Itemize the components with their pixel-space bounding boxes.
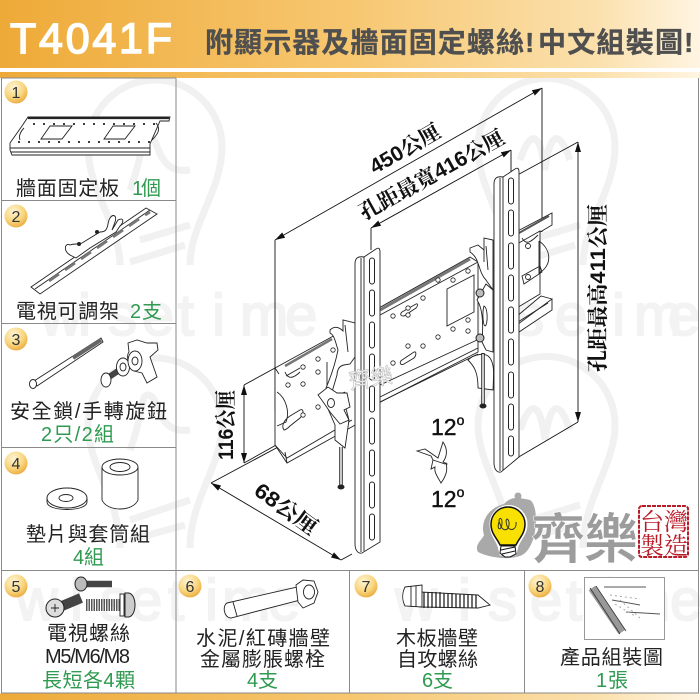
plate right extension — [510, 213, 552, 338]
watermark: brand text — [15, 283, 700, 633]
icon: washer — [116, 358, 130, 376]
bottom strip — [0, 694, 700, 700]
header slogan: 中文組裝圖 — [538, 27, 683, 58]
badge 1 — [4, 80, 28, 104]
label: 產品組裝圖 — [560, 646, 663, 669]
icon: expansion bolt — [224, 580, 318, 618]
badge 6: 6 — [186, 579, 195, 596]
right vertical rail — [494, 168, 519, 472]
red seal: 製 — [640, 533, 664, 560]
quantity: 1張 — [596, 670, 628, 692]
watermark: brand text: wisetime — [394, 283, 700, 348]
panel 5: TV screws — [4, 574, 135, 692]
tilt angle lower: 12 — [431, 486, 457, 512]
badge 2: 2 — [12, 209, 21, 226]
icon: wall plate — [10, 117, 170, 155]
panel 8: assembly diagram sheet — [528, 574, 664, 692]
red seal — [639, 506, 688, 560]
label: 牆面固定板 — [16, 177, 119, 200]
tilt angle upper: 12 — [431, 414, 457, 440]
badge 8: 8 — [536, 579, 545, 596]
icon: washer — [47, 488, 87, 510]
quantity: 長短各4顆 — [42, 669, 135, 692]
header underline strip — [0, 72, 700, 78]
watermark: brand text: wisetime — [39, 283, 317, 348]
label: 電視螺絲 — [47, 622, 130, 645]
badge 7: 7 — [362, 579, 371, 596]
header slogan: ! — [525, 27, 534, 58]
label: 墊片與套筒組 — [26, 523, 150, 546]
panel 4: washer and sleeve — [4, 452, 150, 569]
tilt angle lower: o — [457, 484, 465, 500]
left tilt arm and knob — [318, 320, 355, 490]
header slogan — [205, 27, 693, 58]
small center watermark: 齊樂 — [347, 363, 394, 394]
tilt arrows icon — [417, 442, 447, 483]
badge 4: 4 — [12, 456, 21, 473]
label line 2: 金屬膨脹螺栓 — [200, 648, 325, 671]
label line 1: 木板牆壁 — [396, 627, 478, 650]
dimension: 116: 116公厘 — [215, 390, 238, 460]
quantity: 4支 — [247, 669, 278, 692]
watermark: brand text: wisetime — [394, 568, 700, 633]
label: 安全鎖/手轉旋鈕 — [10, 400, 167, 423]
panel 2: adjustable rail — [4, 204, 162, 323]
left vertical rail — [355, 248, 380, 553]
dimension: 411: 孔距最高411公厘 — [586, 204, 610, 372]
icon: short screw — [101, 371, 118, 387]
badge 4 — [4, 452, 28, 474]
size list: M5/M6/M8 — [45, 646, 130, 668]
badge 3: 3 — [12, 332, 21, 349]
quantity: 2只/2組 — [41, 423, 114, 446]
main diagram: wall plate assembly — [275, 168, 552, 553]
red seal: 台 — [640, 509, 664, 536]
left plate — [275, 328, 357, 463]
icon: long screw with washers — [86, 593, 135, 617]
dimension: 450: 450公厘 — [366, 120, 445, 179]
icon: tapping screw — [403, 585, 490, 608]
header banner — [0, 0, 700, 68]
right tilt arm — [468, 238, 494, 408]
quantity: 1個 — [132, 177, 161, 200]
dimension: 68: 68公厘 — [250, 479, 322, 540]
label line 1: 水泥/紅磚牆壁 — [196, 627, 330, 650]
icon: long bolt — [30, 338, 103, 388]
label: 電視可調架 — [16, 300, 119, 323]
badge 1: 1 — [12, 85, 21, 102]
icon: knob — [128, 340, 158, 383]
icon: small screw — [75, 577, 112, 591]
icon: sleeve — [102, 459, 138, 509]
dimension: 416: 孔距最寬416公厘 — [356, 126, 509, 225]
main diagram: dimension lines — [211, 88, 578, 560]
plate center body — [361, 257, 478, 412]
panel 1: wall plate — [4, 80, 170, 200]
badge 5: 5 — [12, 579, 21, 596]
model number title: T4041F — [10, 15, 172, 63]
badge 2 — [4, 204, 28, 228]
quantity: 4組 — [73, 546, 104, 569]
badge 6 — [178, 574, 202, 598]
watermark: light bulbs — [88, 78, 615, 548]
logo dot — [514, 492, 522, 500]
watermark: brand text: wisetime — [15, 568, 300, 633]
icon: yellow bulb — [491, 506, 526, 557]
brand logo — [477, 492, 688, 570]
icon: TV rail — [31, 208, 157, 294]
panel 6: expansion bolt — [178, 574, 330, 692]
panel 3: safety lock and knob — [4, 328, 167, 446]
icon: assembly sheet — [584, 578, 664, 640]
badge 3 — [4, 328, 28, 350]
label line 2: 自攻螺絲 — [397, 648, 478, 671]
icon: medium screw — [46, 598, 81, 617]
quantity: 2支 — [130, 300, 162, 323]
red seal: 造 — [664, 533, 688, 560]
tilt angle upper: o — [457, 412, 465, 428]
header slogan: 附顯示器及牆面固定螺絲 — [205, 27, 524, 58]
header slogan: ! — [684, 27, 693, 58]
quantity: 6支 — [422, 669, 453, 692]
logo name: 齊樂 — [531, 510, 638, 570]
red seal: 灣 — [664, 509, 688, 536]
panel 7: tapping screw — [354, 574, 490, 692]
logo gray blob — [477, 498, 536, 558]
